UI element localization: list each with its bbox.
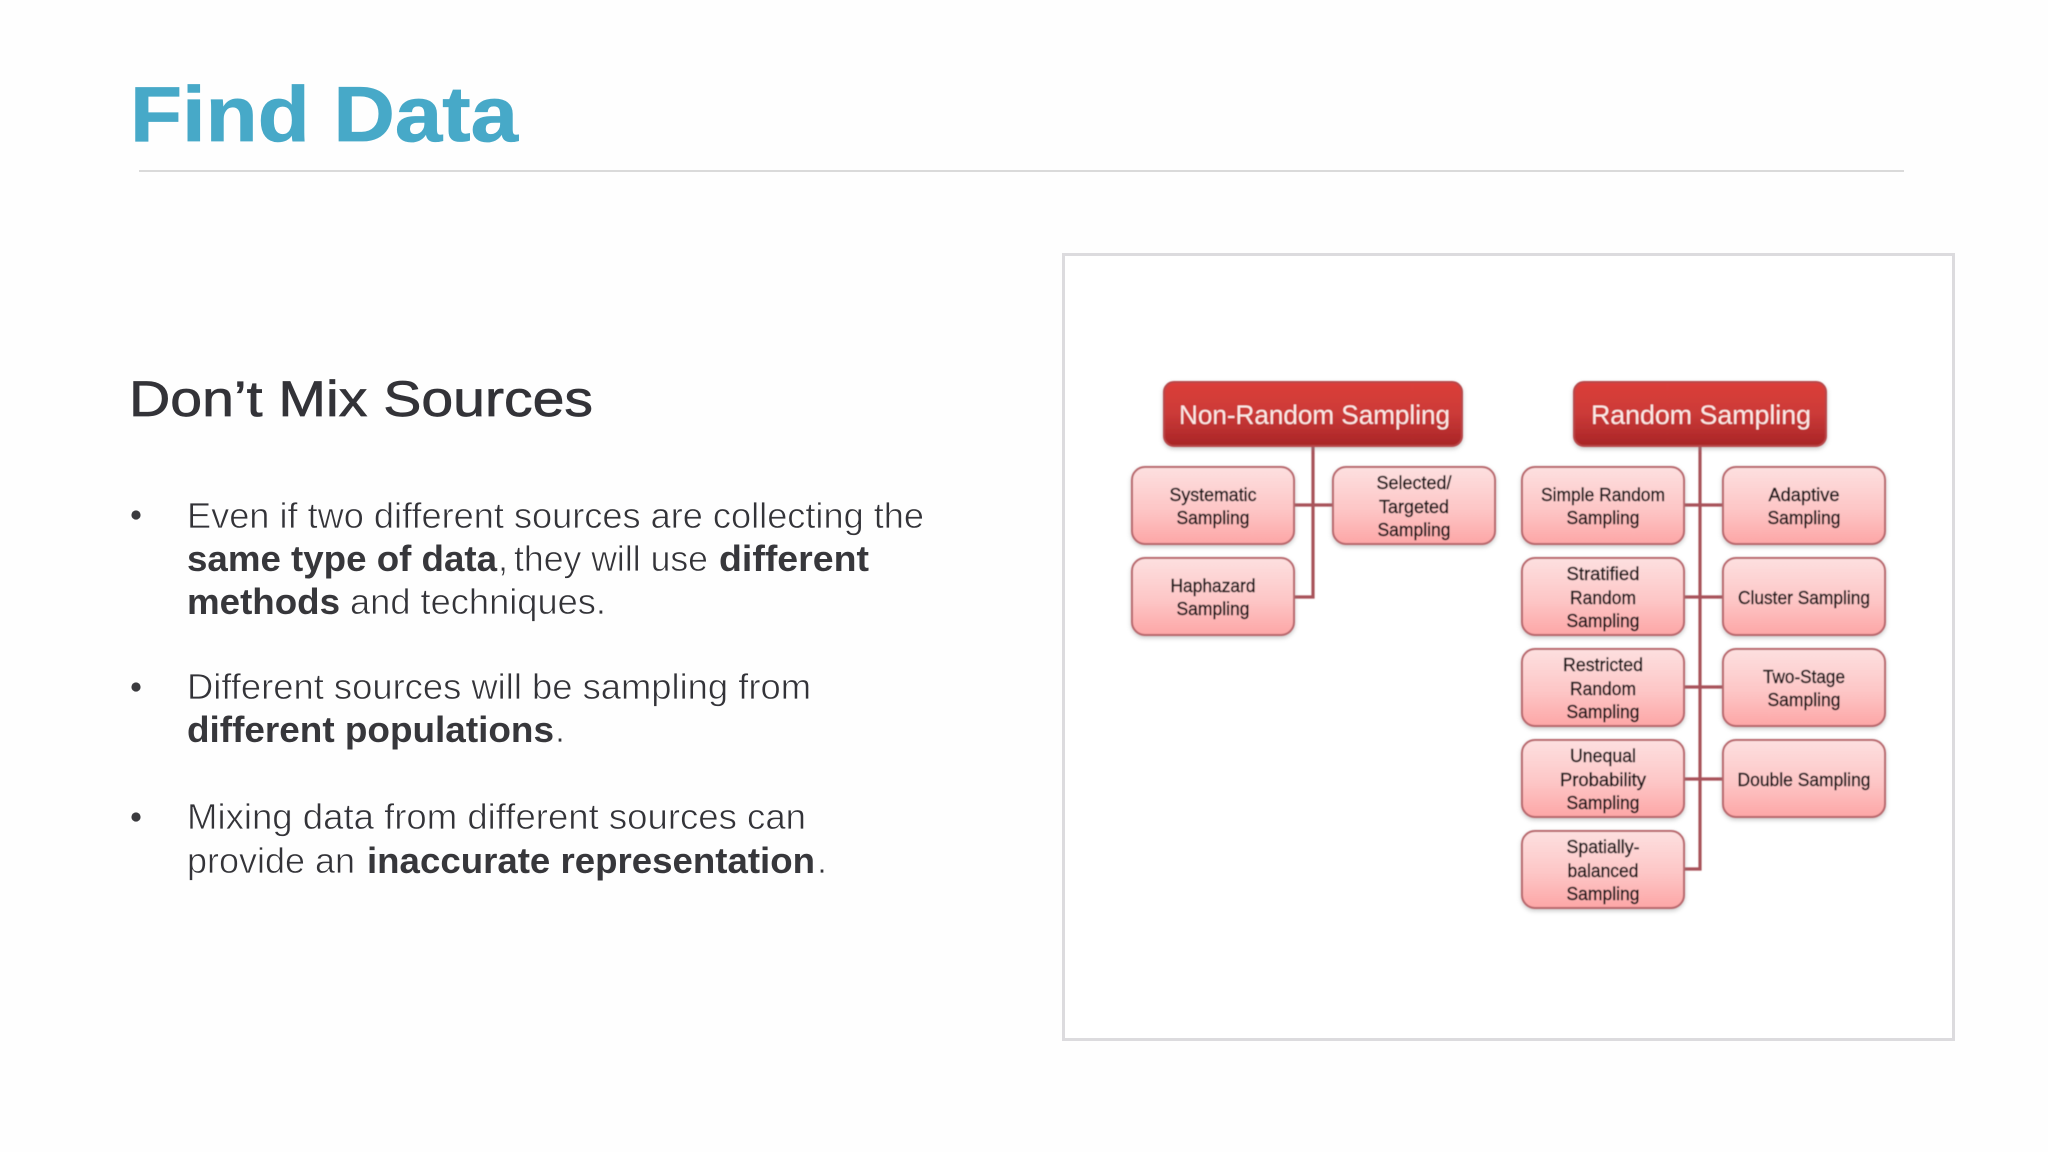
two-stage sampling	[1723, 649, 1885, 726]
stratified random sampling: Stratified	[1566, 564, 1640, 584]
haphazard sampling	[1132, 558, 1294, 635]
stratified random sampling: Random	[1570, 588, 1636, 608]
adaptive sampling: Sampling	[1768, 508, 1840, 528]
image panel frame	[1064, 254, 1954, 1040]
bullet 2	[131, 666, 811, 750]
restricted random sampling: Random	[1570, 679, 1636, 699]
bullet 1: same type of data	[187, 538, 498, 579]
bullet 3: Mixing data from different sources can	[187, 796, 806, 837]
systematic sampling	[1132, 467, 1294, 544]
double sampling	[1723, 740, 1885, 817]
stratified random sampling	[1522, 558, 1684, 635]
selected targeted sampling: Targeted	[1379, 497, 1449, 517]
title rule	[139, 170, 1904, 172]
unequal probability sampling: Unequal	[1570, 746, 1636, 766]
double sampling: Double Sampling	[1738, 770, 1870, 790]
adaptive sampling	[1723, 467, 1885, 544]
simple random sampling	[1522, 467, 1684, 544]
spatially-balanced sampling: balanced	[1568, 861, 1638, 881]
adaptive sampling: Adaptive	[1768, 485, 1840, 505]
cluster sampling: Cluster Sampling	[1738, 588, 1870, 608]
bullet 3: inaccurate representation	[367, 840, 815, 881]
selected targeted sampling: Selected/	[1376, 473, 1452, 493]
random sampling header: Random Sampling	[1591, 400, 1811, 430]
bullet 3: provide an	[187, 840, 355, 881]
bullet 2: Different sources will be sampling from	[187, 666, 811, 707]
selected targeted sampling	[1333, 467, 1495, 544]
systematic sampling: Sampling	[1176, 508, 1250, 528]
bullet 1: and techniques.	[350, 581, 606, 622]
bullet 1: different	[719, 538, 869, 579]
title: Find Data	[130, 70, 519, 158]
two-stage sampling: Sampling	[1768, 690, 1840, 710]
bullet list	[131, 495, 924, 881]
non-random sampling header	[1164, 382, 1462, 446]
haphazard sampling: Sampling	[1176, 599, 1250, 619]
sampling chart	[1132, 382, 1885, 908]
bullet 1: ,	[498, 538, 508, 579]
two-stage sampling: Two-Stage	[1763, 667, 1845, 687]
restricted random sampling: Sampling	[1566, 702, 1640, 722]
spatially-balanced sampling	[1522, 831, 1684, 908]
bullet 3: .	[817, 840, 827, 881]
restricted random sampling: Restricted	[1563, 655, 1643, 675]
bullet 3	[131, 796, 827, 881]
selected targeted sampling: Sampling	[1378, 520, 1450, 540]
bullet 1	[131, 495, 924, 622]
bullet 2: different populations	[187, 709, 554, 750]
simple random sampling: Simple Random	[1541, 485, 1665, 505]
haphazard sampling: Haphazard	[1170, 576, 1256, 596]
non-random sampling header: Non-Random Sampling	[1179, 400, 1450, 430]
unequal probability sampling	[1522, 740, 1684, 817]
random connector lines	[1684, 446, 1723, 869]
restricted random sampling	[1522, 649, 1684, 726]
stratified random sampling: Sampling	[1566, 611, 1640, 631]
simple random sampling: Sampling	[1566, 508, 1640, 528]
section heading: Don’t Mix Sources	[129, 371, 593, 427]
unequal probability sampling: Probability	[1560, 770, 1646, 790]
spatially-balanced sampling: Spatially-	[1566, 837, 1640, 857]
cluster sampling	[1723, 558, 1885, 635]
unequal probability sampling: Sampling	[1566, 793, 1640, 813]
non-random connector lines	[1294, 446, 1333, 597]
bullet 1: they will use	[514, 538, 708, 579]
bullet 2: .	[555, 709, 565, 750]
bullet 1: methods	[187, 581, 340, 622]
bullet 1: Even if two different sources are collecting the	[187, 495, 924, 536]
random sampling header	[1574, 382, 1826, 446]
spatially-balanced sampling: Sampling	[1566, 884, 1640, 904]
systematic sampling: Systematic	[1170, 485, 1256, 505]
